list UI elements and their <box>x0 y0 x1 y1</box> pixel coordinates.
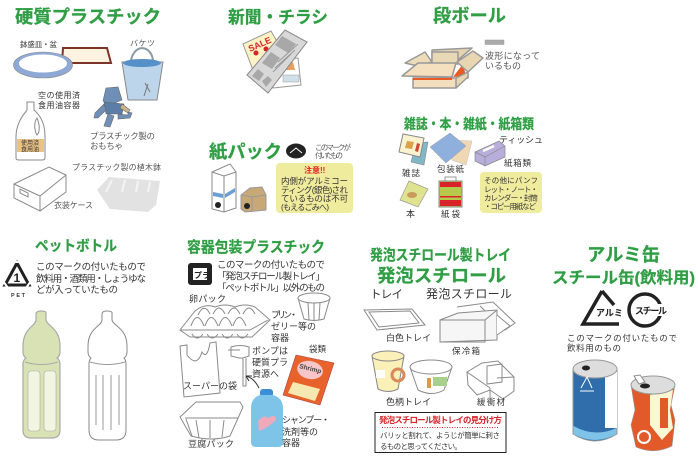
label: colored tray: 色柄トレイ <box>386 396 431 407</box>
callout: how to identify foam trays <box>375 412 506 452</box>
icon: planter <box>97 177 160 212</box>
label: plastic toys line 2: おもちゃ <box>90 141 123 151</box>
label: shampoo containers: 容器 <box>282 437 300 448</box>
panel: container packaging plastic <box>180 238 334 449</box>
label: paper bag: 紙袋 <box>441 209 460 219</box>
text: packaging description: このマークの付いたもので <box>217 260 325 271</box>
text: PET description: 飲料用・酒類用・しょうゆな <box>36 273 146 285</box>
icon: shampoo bottle <box>251 389 283 447</box>
icon: clear bottle <box>88 311 127 440</box>
label: tissue: ティッシュ <box>499 135 543 145</box>
icon: PET recycling mark: 1 <box>14 271 20 285</box>
callout: other paper note: その他にパンフ <box>484 175 538 185</box>
icon: oil bottle: 使用済 <box>21 139 39 147</box>
icon: magazines <box>399 134 428 165</box>
label: shampoo containers: シャンプー・ <box>282 415 330 425</box>
icon: yellow cup <box>372 351 404 392</box>
icon: plastic mark: プラ <box>194 271 210 280</box>
label: cushioning: 緩衝材 <box>477 397 505 407</box>
heading: hard plastics: 硬質プラスチック <box>15 7 161 27</box>
callout: caution note: 内側がアルミコー <box>281 176 348 186</box>
label: cooking oil container line 2: 食用油容器 <box>38 100 80 110</box>
heading: PET bottles: ペットボトル <box>35 238 117 255</box>
panel: hard plastics <box>14 7 163 212</box>
panel: paper cartons <box>209 142 353 213</box>
icon: cushioning <box>467 361 514 399</box>
icon: carton mark <box>286 144 306 158</box>
label: bucket: バケツ <box>130 39 155 48</box>
panel: aluminum and steel cans <box>552 245 695 451</box>
text: PET description: どが入っていたもの <box>36 284 118 296</box>
icon: steel mark: スチール <box>635 306 667 316</box>
icon: flyer back <box>273 58 301 88</box>
icon: clothes case <box>14 167 66 211</box>
panel: foam trays and styrofoam <box>364 246 515 452</box>
callout: how to identify foam trays: 発泡スチロール製トレイの見分け方 <box>379 415 502 425</box>
label: bowls and trays: 鉢盛皿・盆 <box>20 39 58 49</box>
icon: corrugation sample <box>485 40 504 44</box>
callout: how to identify foam trays: バリッと割れて、ようじが簡単に刺さ <box>380 430 500 440</box>
text: packaging description <box>217 260 325 294</box>
icon: crushed can <box>631 375 675 451</box>
arrow: pump to hard plastic <box>246 376 259 388</box>
heading: paper carton: 紙パック <box>209 142 282 162</box>
text: PET description <box>36 262 146 296</box>
callout: how to identify foam trays: るものと思ってください。 <box>380 442 462 451</box>
panel: magazines and mixed paper <box>399 116 543 219</box>
icon: tray <box>62 48 111 63</box>
icon: green bottle <box>23 311 60 438</box>
heading: container packaging plastic: 容器包装プラスチック <box>187 238 325 256</box>
heading: cardboard: 段ボール <box>433 6 506 26</box>
text: PET description: このマークの付いたもので <box>36 262 146 273</box>
icon: cooler box <box>440 302 515 342</box>
callout: caution note: 注意!! <box>304 165 325 175</box>
icon: cardboard box <box>402 48 483 88</box>
label: book: 本 <box>406 208 415 219</box>
icon: oil bottle: 食用油 <box>21 146 39 154</box>
label: shampoo containers <box>282 415 330 448</box>
label: wrapping paper: 包装紙 <box>437 164 464 174</box>
icon: toy robot <box>94 87 132 127</box>
callout: other paper note: カレンダー・封筒 <box>484 192 538 202</box>
label: plastic toys: プラスチック製の <box>90 131 155 141</box>
heading: foam tray: 発泡スチロール製トレイ <box>370 246 511 264</box>
panel: cardboard <box>402 6 540 88</box>
label: egg carton: 卵パック <box>189 293 226 304</box>
label: bags: 袋類 <box>309 344 326 354</box>
heading: steel cans: スチール缶(飲料用) <box>552 268 695 287</box>
icon: tofu pack <box>180 402 243 439</box>
icon: milk carton <box>212 164 236 212</box>
icon: PET recycling mark: PET <box>11 293 26 299</box>
text: can description <box>567 333 677 353</box>
icon: pudding cup <box>298 293 330 320</box>
heading: newspapers: 新聞・チラシ <box>228 8 328 27</box>
icon: PET recycling mark <box>3 262 31 299</box>
label: plastic planter: プラスチック製の植木鉢 <box>72 162 161 172</box>
label: pump note: 硬質プラ <box>252 356 288 368</box>
callout: caution note <box>276 163 353 213</box>
callout: other paper note: レット・ノート・ <box>484 185 538 194</box>
label: shampoo containers: 洗剤等の <box>282 426 318 437</box>
icon: shopping bag <box>180 342 220 397</box>
label: pudding containers <box>271 310 316 343</box>
icon: small carton <box>241 187 266 212</box>
text: packaging description: 「ペットボトル」以外のもの <box>217 282 325 294</box>
label: pump note: 資源へ <box>252 368 279 379</box>
label: mark note: このマークが <box>315 142 352 152</box>
icon: wrapping paper <box>430 133 472 165</box>
heading: styrofoam: 発泡スチロール <box>377 266 506 286</box>
icon: plate <box>14 52 72 78</box>
icon: plastic mark <box>188 263 212 285</box>
label: cooler box: 保冷箱 <box>452 346 480 356</box>
icon: aluminum can <box>573 360 617 441</box>
label: pump note: ポンプは <box>252 346 288 356</box>
label: mark note line 2: 付いたもの <box>315 150 343 160</box>
label: tofu pack: 豆腐パック <box>188 438 234 449</box>
heading: aluminum cans: アルミ缶 <box>587 245 660 265</box>
icon: paper bag <box>439 177 462 207</box>
callout: caution note: (もえるごみへ) <box>281 202 329 212</box>
icon: patterned bowl <box>410 360 452 394</box>
callout: other paper note <box>480 172 542 213</box>
icon: bucket <box>122 48 163 100</box>
icon: aluminum mark: アルミ <box>596 308 623 318</box>
label: styrofoam: 発泡スチロール <box>426 287 512 301</box>
icon: pump <box>228 346 249 386</box>
label: paper boxes: 紙箱類 <box>504 158 531 168</box>
text: can description: 飲料用のもの <box>567 343 621 353</box>
callout: caution note: ているものは不可 <box>281 194 348 204</box>
icon: white tray <box>364 309 425 330</box>
text: can description: このマークの付いたもので <box>567 333 677 343</box>
icon: book <box>400 181 428 207</box>
label: pudding containers: ゼリー等の <box>271 320 316 332</box>
label: clothes case: 衣装ケース <box>54 200 93 210</box>
callout: other paper note: ・コピー用紙など <box>484 201 536 211</box>
panel: newspapers and flyers <box>228 8 328 93</box>
heading: mixed paper: 雑誌・本・雑紙・紙箱類 <box>404 116 534 132</box>
label: pump note <box>252 346 288 379</box>
icon: oil bottle <box>16 102 45 160</box>
label: white tray: 白色トレイ <box>386 332 431 343</box>
label: tray: トレイ <box>370 289 403 301</box>
label: corrugated note line 2: いるもの <box>485 61 521 71</box>
label: supermarket bag: スーパーの袋 <box>183 380 237 391</box>
panel: PET bottles <box>3 238 146 440</box>
icon: snack bag <box>283 355 334 405</box>
text: packaging description: 「発泡スチロール製トレイ」 <box>217 270 325 282</box>
icon: steel mark <box>629 294 668 326</box>
label: empty cooking oil container: 空の使用済 <box>38 90 80 100</box>
icon: sale flyer: SALE <box>247 35 273 54</box>
icon: tissue box <box>475 141 505 166</box>
icon: egg carton <box>180 305 270 338</box>
icon: snack bag: Shrimp <box>299 363 322 375</box>
callout: caution note: ティング(銀色)され <box>281 185 348 195</box>
icon: aluminum mark <box>583 291 623 324</box>
label: pudding containers: 容器 <box>271 332 289 343</box>
label: pudding containers: プリン・ <box>271 310 298 320</box>
icon: newspaper <box>247 30 307 93</box>
label: corrugated note: 波形になって <box>485 50 540 61</box>
label: magazines: 雑誌 <box>402 168 420 178</box>
